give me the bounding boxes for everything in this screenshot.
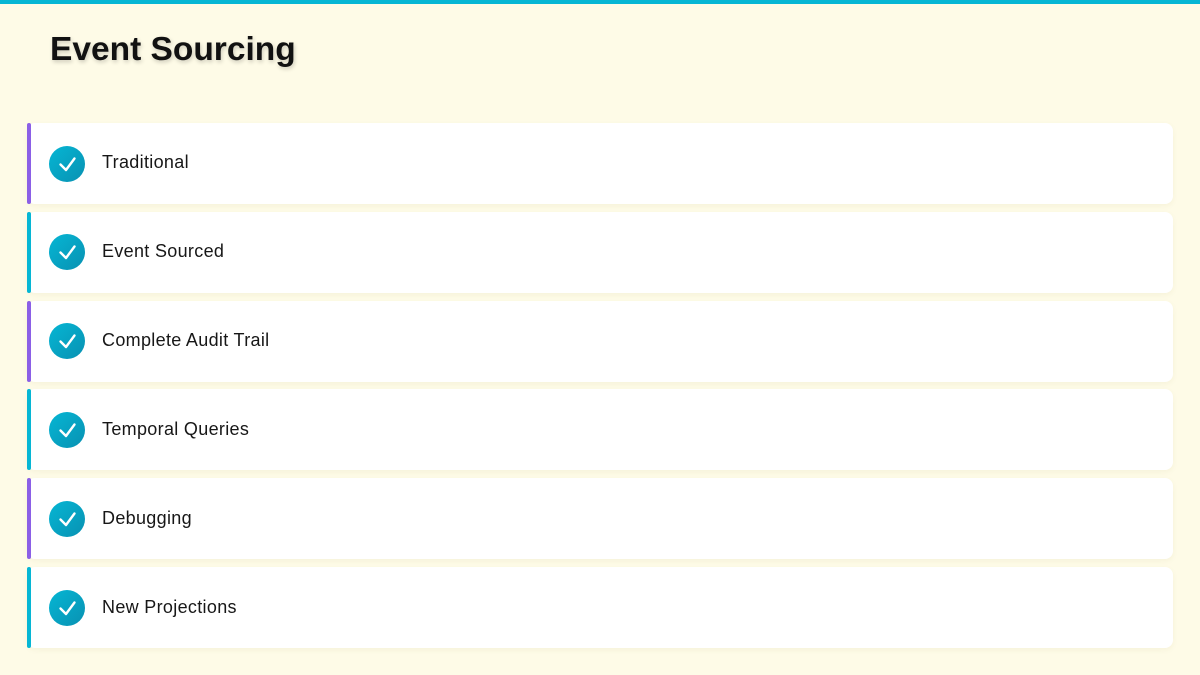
row: Event Sourced [27, 212, 1173, 293]
label: Event Sourced [102, 241, 224, 261]
icon: check [49, 234, 85, 270]
top accent bar [0, 0, 1200, 4]
label: New Projections [102, 597, 237, 617]
row: Complete Audit Trail [27, 301, 1173, 382]
label: Temporal Queries [102, 419, 249, 439]
icon: check [49, 146, 85, 182]
row: Temporal Queries [27, 389, 1173, 470]
title: Event Sourcing [50, 31, 296, 68]
row: New Projections [27, 567, 1173, 648]
icon: check [49, 323, 85, 359]
icon: check [49, 590, 85, 626]
row: Traditional [27, 123, 1173, 204]
label: Debugging [102, 508, 192, 528]
label: Traditional [102, 152, 189, 172]
icon: check [49, 412, 85, 448]
label: Complete Audit Trail [102, 330, 269, 350]
icon: check [49, 501, 85, 537]
row: Debugging [27, 478, 1173, 559]
